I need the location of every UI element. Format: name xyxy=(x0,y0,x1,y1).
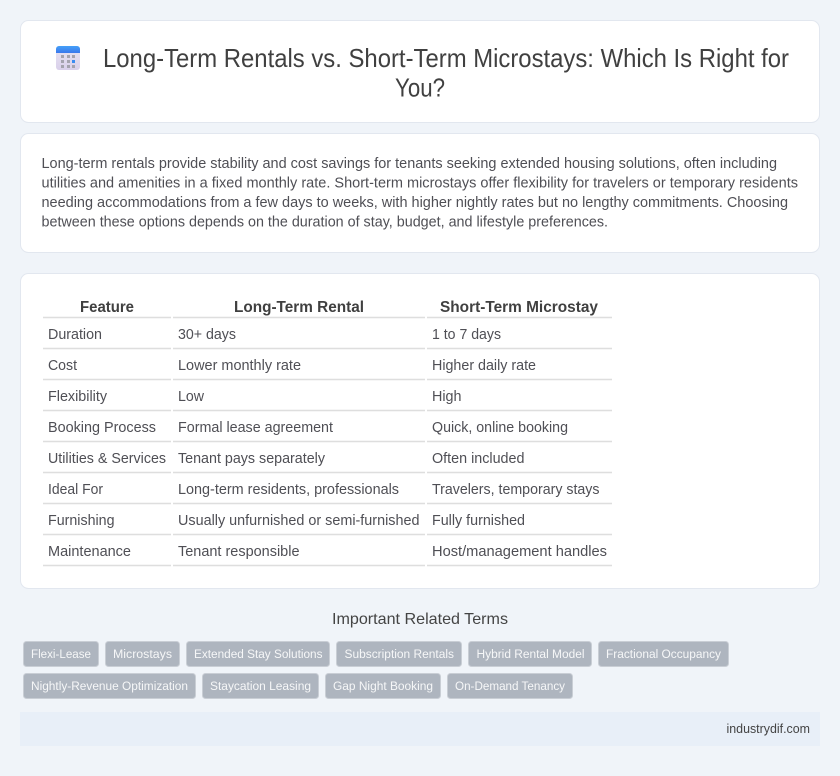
table row: Furnishing: Fully furnished xyxy=(432,513,525,529)
panel: introduction xyxy=(20,134,820,252)
tag group: related terms xyxy=(24,642,728,698)
tag: Staycation Leasing xyxy=(202,674,318,698)
tag: Subscription Rentals xyxy=(336,642,462,666)
table row: Maintenance: Host/management handles xyxy=(432,544,607,560)
tag: Nightly-Revenue Optimization xyxy=(24,674,196,698)
tag: Gap Night Booking xyxy=(326,674,440,698)
title: Long-Term Rentals vs. Short-Term Microstays: Which Is Right for xyxy=(103,45,789,73)
tag: Fractional Occupancy: Fractional Occupancy xyxy=(606,647,722,661)
table row: Utilities & Services: Often included xyxy=(432,451,524,467)
table row: Ideal For: Ideal For xyxy=(48,482,103,498)
text block: introduction paragraph: needing accommodations from a few days to weeks, with higher nightly rates but no lengthy commitments. Choosing xyxy=(42,195,788,211)
table row: Flexibility: High xyxy=(432,389,462,405)
table row: Duration: 1 to 7 days xyxy=(432,327,501,343)
table row: Booking Process: Booking Process xyxy=(48,420,156,436)
table row: Maintenance: Maintenance xyxy=(48,544,131,560)
table header: Short-Term Microstay xyxy=(440,299,598,316)
tag: Staycation Leasing: Staycation Leasing xyxy=(210,679,311,693)
tag: Nightly-Revenue Optimization: Nightly-Revenue Optimization xyxy=(31,679,188,693)
tag: Extended Stay Solutions xyxy=(186,642,330,666)
table row: Duration: 30+ days xyxy=(178,327,236,343)
table header: Long-Term Rental xyxy=(234,299,364,316)
table row: Booking Process: Formal lease agreement xyxy=(178,420,333,436)
title: You? xyxy=(395,74,445,102)
panel: comparison table xyxy=(20,274,820,588)
tag: On-Demand Tenancy xyxy=(448,674,572,698)
table row: Cost: Lower monthly rate xyxy=(178,358,301,374)
tag: Subscription Rentals: Subscription Rentals xyxy=(344,647,454,661)
heading: important related terms: Important Related Terms xyxy=(332,611,508,628)
table header xyxy=(43,299,612,318)
footer source text: industrydif.com xyxy=(726,722,810,736)
tag: Extended Stay Solutions: Extended Stay Solutions xyxy=(194,647,322,661)
text block: introduction paragraph xyxy=(42,156,798,230)
tag: Fractional Occupancy xyxy=(598,642,728,666)
table row: Cost xyxy=(43,358,612,380)
panel: title header xyxy=(20,20,820,122)
footer band xyxy=(20,712,820,746)
tag: Hybrid Rental Model: Hybrid Rental Model xyxy=(476,647,584,661)
table row: Utilities & Services: Utilities & Services xyxy=(48,451,166,467)
tag: On-Demand Tenancy: On-Demand Tenancy xyxy=(455,679,566,693)
table row: Maintenance xyxy=(43,544,612,566)
table row: Flexibility xyxy=(43,389,612,410)
table row: Booking Process: Quick, online booking xyxy=(432,420,568,436)
table row: Duration xyxy=(43,327,612,348)
table row: Cost: Cost xyxy=(48,358,77,374)
table row: Utilities & Services xyxy=(43,451,612,472)
table row: Ideal For xyxy=(43,482,612,504)
table row: Maintenance: Tenant responsible xyxy=(178,544,300,560)
title xyxy=(103,45,789,102)
table row: Booking Process xyxy=(43,420,612,442)
tag: Microstays xyxy=(106,642,180,666)
tag: Microstays: Microstays xyxy=(113,647,172,661)
table row: Furnishing xyxy=(43,513,612,534)
table row: Ideal For: Travelers, temporary stays xyxy=(432,482,600,498)
text block: introduction paragraph: between these options depends on the duration of stay, budget, and lifestyle preferences. xyxy=(42,214,608,230)
table row: Cost: Higher daily rate xyxy=(432,358,536,374)
tag: Flexi-Lease xyxy=(24,642,98,666)
icon: calendar xyxy=(56,46,80,70)
table row: Duration: Duration xyxy=(48,327,102,343)
text block: introduction paragraph: Long-term rentals provide stability and cost savings for tenants seeking extended housing solutions, often including xyxy=(42,156,777,172)
tag: Flexi-Lease: Flexi-Lease xyxy=(31,647,91,661)
table row: Utilities & Services: Tenant pays separately xyxy=(178,451,326,467)
tag: Hybrid Rental Model xyxy=(468,642,592,666)
table row: Flexibility: Flexibility xyxy=(48,389,108,405)
table row: Flexibility: Low xyxy=(178,389,205,405)
tag: Gap Night Booking: Gap Night Booking xyxy=(333,679,433,693)
table row: Furnishing: Furnishing xyxy=(48,513,114,529)
table row: Furnishing: Usually unfurnished or semi-furnished xyxy=(178,513,420,529)
text block: introduction paragraph: utilities and amenities in a fixed monthly rate. Short-term microstays offer flexibility for travelers or temporary residents xyxy=(42,176,798,192)
table row: Ideal For: Long-term residents, professionals xyxy=(178,482,399,498)
table header: Feature xyxy=(80,299,134,316)
